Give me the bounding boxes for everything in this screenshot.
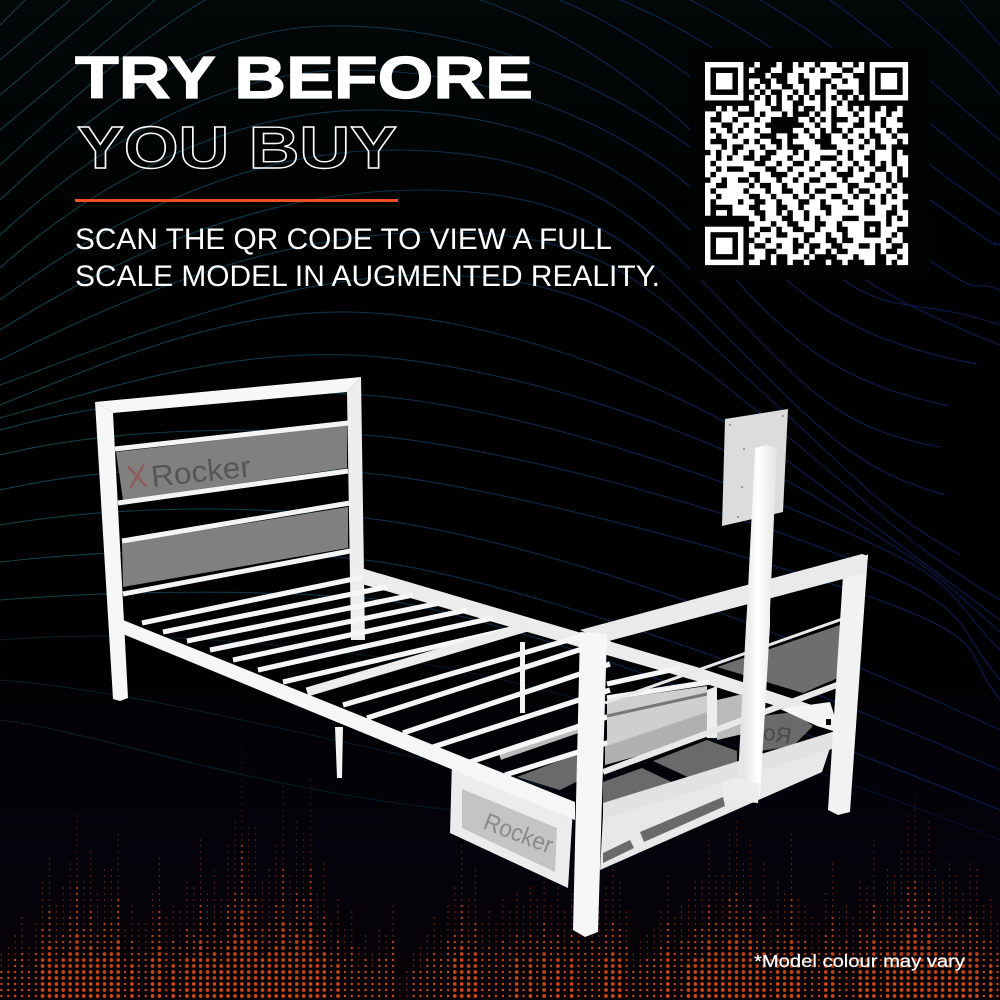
footnote: *Model colour may vary [754,951,965,971]
QR finder pattern: top right [872,65,905,98]
title: you buy (outline): YOU BUY [77,115,397,181]
headboard [95,377,365,701]
footboard back post [828,554,868,815]
under-bed storage [600,617,848,870]
monitor plate [722,409,788,526]
centre cross bar [307,627,527,692]
QR backing panel [690,48,930,280]
orange divider [75,199,398,202]
description text [75,223,660,293]
foot cross rail [603,728,845,819]
pole base [722,778,760,803]
description text: SCALE MODEL IN AUGMENTED REALITY. [75,260,660,293]
far side rail [355,568,833,724]
QR finder pattern: top left [708,65,741,98]
foot mesh panel [717,625,840,693]
headboard logo: Rocker [150,451,252,494]
drawer logo: Rocker [480,808,557,859]
description text: SCAN THE QR CODE TO VIEW A FULL [75,223,612,256]
headboard frame [95,377,365,701]
mirrored logo: Ro [761,719,793,749]
mesh floor [603,712,813,863]
bed illustration [95,377,868,937]
halftone equaliser dots [1,744,997,1000]
front leg post [573,632,607,937]
QR code [705,65,908,262]
monitor pole [722,445,777,803]
slats [142,577,710,775]
rear drawer side [605,709,707,765]
QR data modules [705,65,908,262]
centre support legs [335,642,525,778]
lower frame [600,742,832,870]
headboard rails [115,423,350,594]
title: try before: TRY BEFORE [75,45,533,111]
QR finder pattern: bottom left [708,229,741,262]
footboard top bar [580,554,868,642]
near side rail [118,618,575,820]
under-slat drawer mesh [500,730,600,790]
foot panel rails [603,617,848,772]
white plate [780,702,840,733]
drawer box [450,762,573,888]
headboard mesh panels [116,425,348,587]
